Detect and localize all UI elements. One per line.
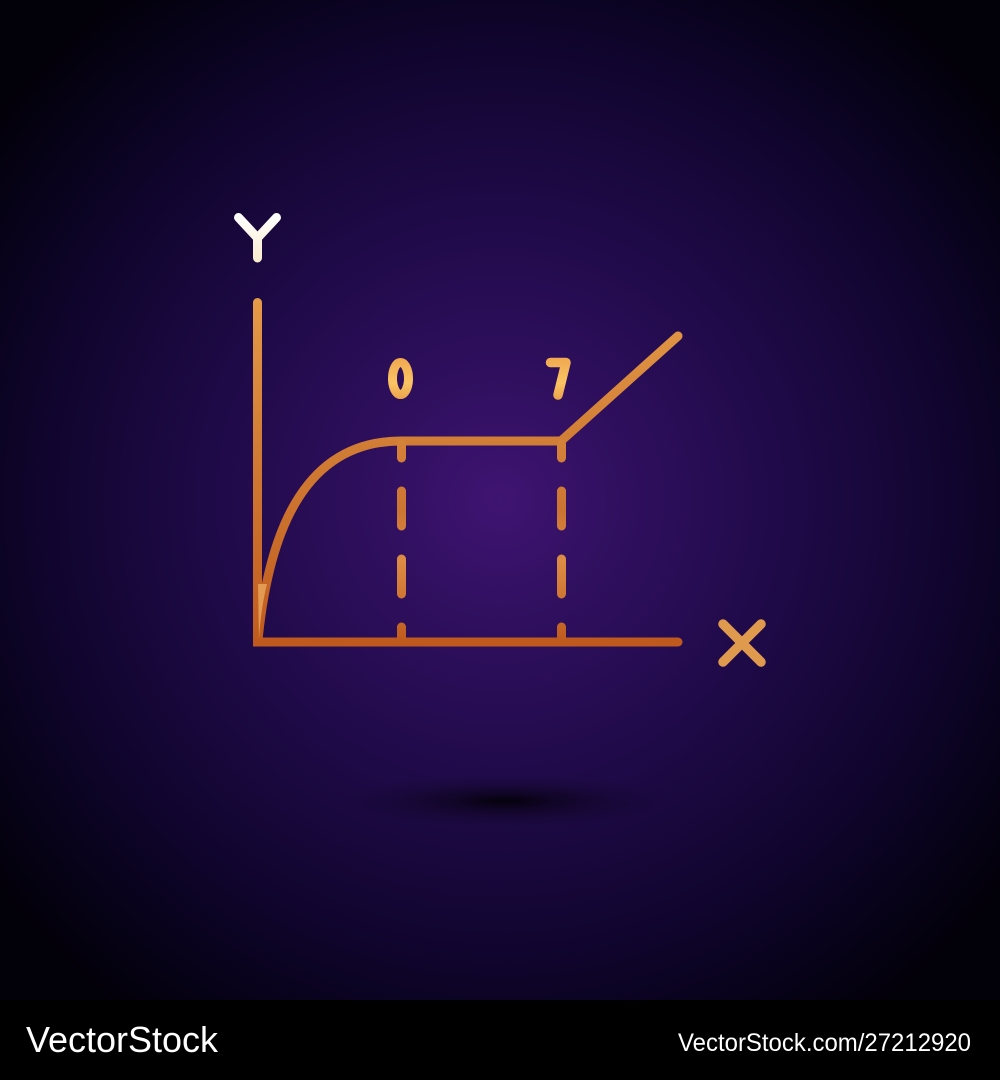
image id: VectorStock.com/27212920 [678,1029,971,1057]
x axis label [723,624,761,662]
footer bar [0,1000,1000,1080]
x axis [258,638,678,646]
digit 7 [550,362,566,395]
y axis [253,302,262,642]
highlight wedge [258,584,267,640]
ground shadow [340,774,670,828]
axis origin corner [253,638,261,646]
line chart [238,218,761,662]
curve [258,336,678,640]
dashed guide at 0 [397,444,406,640]
dashed guide at 7 [557,444,566,640]
brand wordmark: VectorStock [26,1019,219,1060]
digit 0 [392,362,408,394]
y axis label [238,218,276,258]
